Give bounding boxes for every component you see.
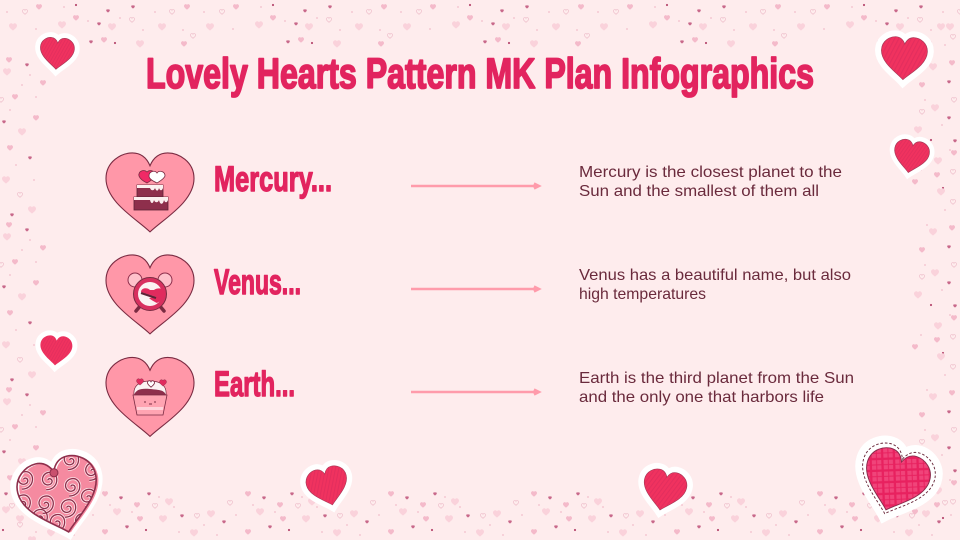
description: Venus has a beautiful name, but also [579, 267, 851, 284]
sticker heart: right side [890, 137, 932, 176]
description: high temperatures [579, 286, 706, 303]
description: Mercury is the closest planet to the [579, 164, 842, 181]
label: Venus: Venus... [214, 263, 301, 302]
row: Earth [106, 357, 854, 436]
icon: heart with alarm clock [106, 255, 194, 334]
label: Mercury: Mercury... [214, 160, 332, 199]
description: Earth is the third planet from the Sun [579, 370, 854, 387]
arrow [411, 286, 539, 292]
sticker heart: top right [879, 35, 929, 81]
description [579, 267, 851, 303]
sticker heart: top left [38, 36, 76, 71]
sticker heart: bottom centre right [638, 466, 690, 515]
sticker heart: left side [39, 334, 74, 367]
arrow [411, 390, 539, 394]
sticker heart: bottom right patterned [850, 437, 941, 525]
description [579, 164, 842, 200]
description [579, 370, 854, 406]
sticker heart: bottom left spirals [10, 449, 102, 540]
description: and the only one that harbors life [579, 389, 824, 406]
row: Venus [106, 255, 851, 334]
icon: heart with cake [106, 153, 194, 232]
description: Sun and the smallest of them all [579, 183, 819, 200]
row: Mercury [106, 153, 842, 232]
arrow [411, 184, 539, 188]
icon: heart with cupcake [106, 357, 194, 436]
sticker heart: bottom centre left [303, 463, 353, 510]
label: Earth: Earth... [214, 365, 295, 404]
